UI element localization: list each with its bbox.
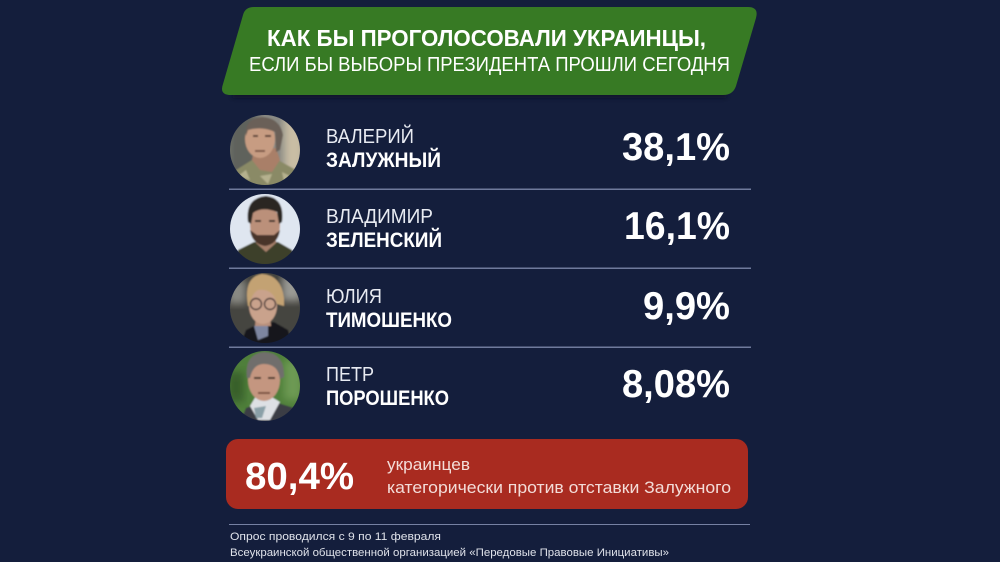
title banner	[222, 7, 757, 98]
value: 9,9%: 9,9%	[643, 285, 730, 328]
callout value: 80,4%	[245, 456, 354, 498]
footnote: Опрос проводился с 9 по 11 февраля	[230, 531, 441, 543]
name: Валерий Залужный: ЗАЛУЖНЫЙ	[326, 148, 441, 172]
row: Зеленский	[228, 192, 730, 266]
row: Порошенко	[228, 349, 730, 423]
callout text: украинцев	[387, 455, 470, 474]
name: Валерий Залужный: ВАЛЕРИЙ	[326, 124, 414, 148]
portrait: Зеленский	[230, 194, 300, 264]
value: 16,1%: 16,1%	[624, 205, 730, 248]
name: Валерий Залужный	[326, 124, 441, 172]
callout text	[387, 455, 731, 497]
portrait: Порошенко	[230, 351, 300, 421]
callout text: категорически против отставки Залужного	[387, 478, 731, 497]
name: Петр Порошенко: ПЕТР	[326, 364, 374, 386]
name: Юлия Тимошенко: ТИМОШЕНКО	[326, 309, 452, 332]
value: 38,1%: 38,1%	[622, 126, 730, 169]
row: Залужный	[228, 113, 730, 187]
name: Юлия Тимошенко: ЮЛИЯ	[326, 286, 382, 308]
value: 8,08%: 8,08%	[622, 363, 730, 406]
name: Владимир Зеленский	[326, 206, 442, 252]
title line 1: КАК БЫ ПРОГОЛОСОВАЛИ УКРАИНЦЫ,	[267, 25, 706, 51]
callout: 80,4%	[226, 439, 748, 509]
portrait: Залужный	[230, 115, 300, 185]
name: Петр Порошенко	[326, 364, 449, 410]
row: Тимошенко	[228, 271, 730, 345]
name: Владимир Зеленский: ВЛАДИМИР	[326, 206, 433, 228]
name: Владимир Зеленский: ЗЕЛЕНСКИЙ	[326, 228, 442, 252]
name: Петр Порошенко: ПОРОШЕНКО	[326, 387, 449, 410]
name: Юлия Тимошенко	[326, 286, 452, 332]
title line 2: ЕСЛИ БЫ ВЫБОРЫ ПРЕЗИДЕНТА ПРОШЛИ СЕГОДНЯ	[249, 54, 730, 76]
footnote	[230, 531, 669, 559]
footnote: Всеукраинской общественной организацией «Передовые Правовые Инициативы»	[230, 547, 669, 559]
portrait: Тимошенко	[230, 273, 300, 343]
